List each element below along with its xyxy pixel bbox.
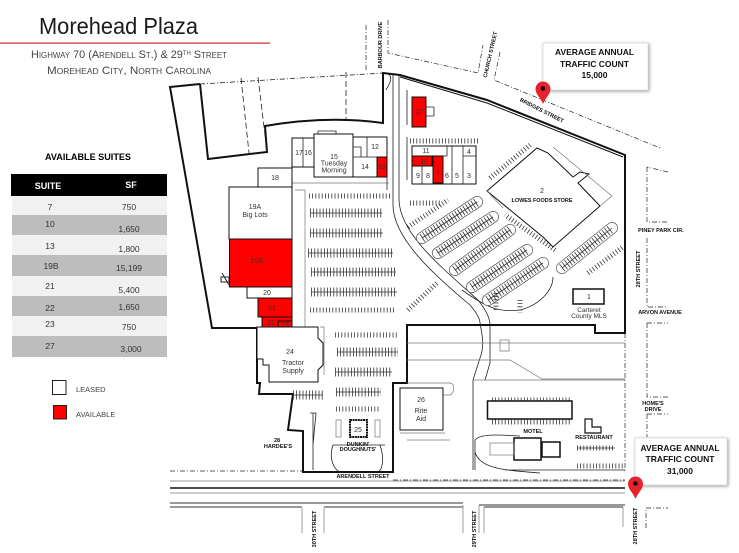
street labels: 29TH STREET bbox=[472, 510, 478, 547]
callout: Bridges Street traffic count: AVERAGE ANNUAL bbox=[555, 47, 634, 57]
street labels bbox=[312, 21, 684, 547]
suite 19B available: 19B bbox=[251, 258, 264, 265]
table rows: 23 bbox=[45, 319, 55, 329]
suites 12 and 14: 12 bbox=[371, 144, 379, 151]
street labels: HOME'S bbox=[642, 401, 664, 407]
legend: AVAILABLE bbox=[76, 410, 115, 419]
suites 16 and 17: 16 bbox=[304, 150, 312, 157]
suite 18 bbox=[258, 168, 292, 187]
callout: Bridges Street traffic count: TRAFFIC COUNT bbox=[560, 59, 630, 69]
suite 22 available: 22 bbox=[267, 320, 275, 327]
title rule bbox=[0, 42, 270, 44]
suite 10 available: 10 bbox=[420, 159, 428, 166]
callout: Arendell Street traffic count: AVERAGE ANNUAL bbox=[640, 443, 720, 453]
suite 24 Tractor Supply: 24 bbox=[286, 349, 294, 356]
building 1 Carteret County MLS bbox=[571, 289, 608, 320]
table rows: 19B bbox=[43, 261, 59, 271]
parking islands bbox=[336, 420, 380, 437]
icon: map pin Bridges Street bbox=[536, 82, 550, 104]
south parcels bbox=[264, 388, 613, 460]
suites 3 to 11 bbox=[412, 146, 476, 184]
street labels: CHURCH STREET bbox=[483, 31, 499, 78]
building 26 Rite Aid bbox=[400, 388, 443, 430]
table rows: 15,199 bbox=[116, 263, 142, 273]
suite 23 available: 23 bbox=[281, 322, 289, 329]
table rows: 10 bbox=[45, 219, 55, 229]
suite 13 available bbox=[377, 157, 387, 177]
building 26 Rite Aid: Aid bbox=[416, 416, 426, 423]
suite 7 available: 7 bbox=[436, 170, 440, 177]
building 25 Dunkin Doughnuts: DUNKIN' bbox=[347, 442, 370, 448]
internal drives bbox=[292, 74, 625, 473]
table rows: 1,800 bbox=[118, 244, 140, 254]
suite 23 available bbox=[278, 321, 292, 329]
suite 10 available bbox=[412, 156, 432, 166]
building 25 Dunkin Doughnuts: DOUGHNUTS' bbox=[340, 447, 377, 453]
suite 15 Tuesday Morning: 15 bbox=[330, 154, 338, 161]
suite 15 Tuesday Morning: Tuesday bbox=[321, 160, 348, 168]
suites 3 to 11: 4 bbox=[467, 149, 471, 156]
suite 19B available bbox=[230, 239, 292, 287]
suite 21 available bbox=[258, 298, 292, 317]
suite 24 Tractor Supply: Supply bbox=[282, 368, 304, 375]
table rows: 27 bbox=[45, 341, 55, 351]
table rows: 7 bbox=[48, 202, 53, 212]
suites 3 to 11: 9 bbox=[416, 173, 420, 180]
suites east block bbox=[412, 97, 612, 320]
suites 3 to 11: 11 bbox=[422, 148, 430, 155]
parking rows bbox=[293, 141, 625, 466]
suite 20: 20 bbox=[263, 290, 271, 297]
restaurant: RESTAURANT bbox=[575, 435, 613, 441]
table rows: 5,400 bbox=[118, 285, 140, 295]
suite 24 Tractor Supply: Tractor bbox=[282, 360, 305, 367]
table header row: SF bbox=[125, 180, 137, 190]
suite 19A Big Lots: Big Lots bbox=[242, 212, 268, 219]
building 26 Rite Aid: Rite bbox=[415, 408, 427, 415]
legend: LEASED bbox=[76, 385, 106, 394]
streets bbox=[170, 20, 668, 533]
suite 18: 18 bbox=[271, 175, 279, 182]
suite 7 available bbox=[433, 156, 443, 183]
suite 19A Big Lots bbox=[229, 187, 292, 239]
suites 3 to 11: 6 bbox=[445, 173, 449, 180]
address bbox=[31, 49, 227, 77]
building 25 Dunkin Doughnuts: 25 bbox=[354, 427, 362, 434]
suite 27 available: 27 bbox=[416, 109, 424, 116]
table header row: SUITE bbox=[35, 181, 61, 191]
suite 27 available bbox=[412, 97, 434, 127]
suite 20 bbox=[247, 287, 292, 298]
restaurant bbox=[575, 419, 613, 441]
table rows: 21 bbox=[45, 281, 55, 291]
building 26 Rite Aid: 26 bbox=[417, 397, 425, 404]
building 1 Carteret County MLS: Carteret bbox=[577, 307, 601, 314]
suites 12 and 14 bbox=[353, 137, 387, 177]
motel bbox=[490, 429, 560, 460]
address: Morehead City, North Carolina bbox=[47, 65, 212, 77]
building 1 Carteret County MLS: County MLS bbox=[571, 313, 608, 320]
building 2 Lowes Foods: 2 bbox=[540, 188, 544, 195]
suites 16 and 17: 17 bbox=[295, 150, 303, 157]
panel: available suites table bbox=[11, 152, 167, 357]
table rows: 750 bbox=[122, 202, 136, 212]
site plan bbox=[170, 20, 684, 547]
table header row bbox=[11, 174, 167, 196]
table rows: 22 bbox=[45, 303, 55, 313]
street labels: ARVON AVENUE bbox=[638, 310, 682, 316]
suite 15 Tuesday Morning: Morning bbox=[321, 168, 347, 174]
street labels: BRIDGES STREET bbox=[519, 97, 565, 125]
loading dock bbox=[221, 273, 229, 285]
street labels: 28TH STREET bbox=[636, 250, 642, 287]
motel: MOTEL bbox=[523, 429, 543, 435]
street labels: 30TH STREET bbox=[312, 510, 318, 547]
Hardees label bbox=[264, 438, 292, 450]
table heading: AVAILABLE SUITES bbox=[45, 152, 131, 162]
street labels: 28TH STREET bbox=[633, 507, 639, 544]
suites 16 and 17 bbox=[292, 138, 314, 167]
Hardees label: HARDEE'S bbox=[264, 444, 292, 450]
suite 13 available: 13 bbox=[378, 164, 386, 171]
building 1 Carteret County MLS: 1 bbox=[587, 294, 591, 301]
table rows: 1,650 bbox=[118, 224, 140, 234]
address: Highway 70 (Arendell St.) & 29 bbox=[31, 49, 184, 61]
callout: Bridges Street traffic count: 15,000 bbox=[582, 70, 608, 80]
callout: Arendell Street traffic count bbox=[635, 438, 727, 485]
street labels: BARBOUR DRIVE bbox=[378, 21, 384, 68]
callout: Arendell Street traffic count: 31,000 bbox=[667, 466, 693, 476]
street labels: DRIVE bbox=[645, 407, 662, 413]
table rows: 750 bbox=[122, 322, 136, 332]
icon: map pin Arendell Street bbox=[628, 477, 643, 499]
title: Morehead Plaza bbox=[39, 13, 198, 39]
address: Street bbox=[191, 49, 227, 61]
suites 3 to 11: 8 bbox=[426, 173, 430, 180]
suite 21 available: 21 bbox=[268, 305, 276, 312]
suites 12 and 14: 14 bbox=[361, 164, 369, 171]
table rows bbox=[12, 196, 167, 357]
callout: Bridges Street traffic count bbox=[543, 43, 648, 90]
suites 3 to 11: 5 bbox=[455, 173, 459, 180]
street labels: ARENDELL STREET bbox=[336, 474, 390, 480]
address: TH bbox=[183, 51, 191, 57]
suite 19A Big Lots: 19A bbox=[249, 204, 262, 211]
table rows: 13 bbox=[45, 241, 55, 251]
motel bar building bbox=[488, 401, 572, 419]
table rows: 3,000 bbox=[120, 344, 142, 354]
building 2 Lowes Foods bbox=[487, 147, 612, 247]
suite 15 Tuesday Morning bbox=[314, 131, 353, 177]
building 25 Dunkin Doughnuts bbox=[340, 420, 377, 453]
Hardees label: 28 bbox=[274, 438, 280, 444]
legend bbox=[52, 380, 115, 419]
suites west wing bbox=[221, 131, 387, 382]
building 2 Lowes Foods: LOWES FOODS STORE bbox=[512, 198, 573, 204]
suites 3 to 11: 3 bbox=[467, 173, 471, 180]
callout: Arendell Street traffic count: TRAFFIC COUNT bbox=[646, 454, 715, 464]
street labels: PINEY PARK CIR. bbox=[638, 228, 684, 234]
suite 22 available bbox=[262, 317, 292, 328]
table rows: 1,650 bbox=[118, 302, 140, 312]
suite 24 Tractor Supply bbox=[257, 327, 323, 382]
property boundary bbox=[170, 72, 625, 472]
